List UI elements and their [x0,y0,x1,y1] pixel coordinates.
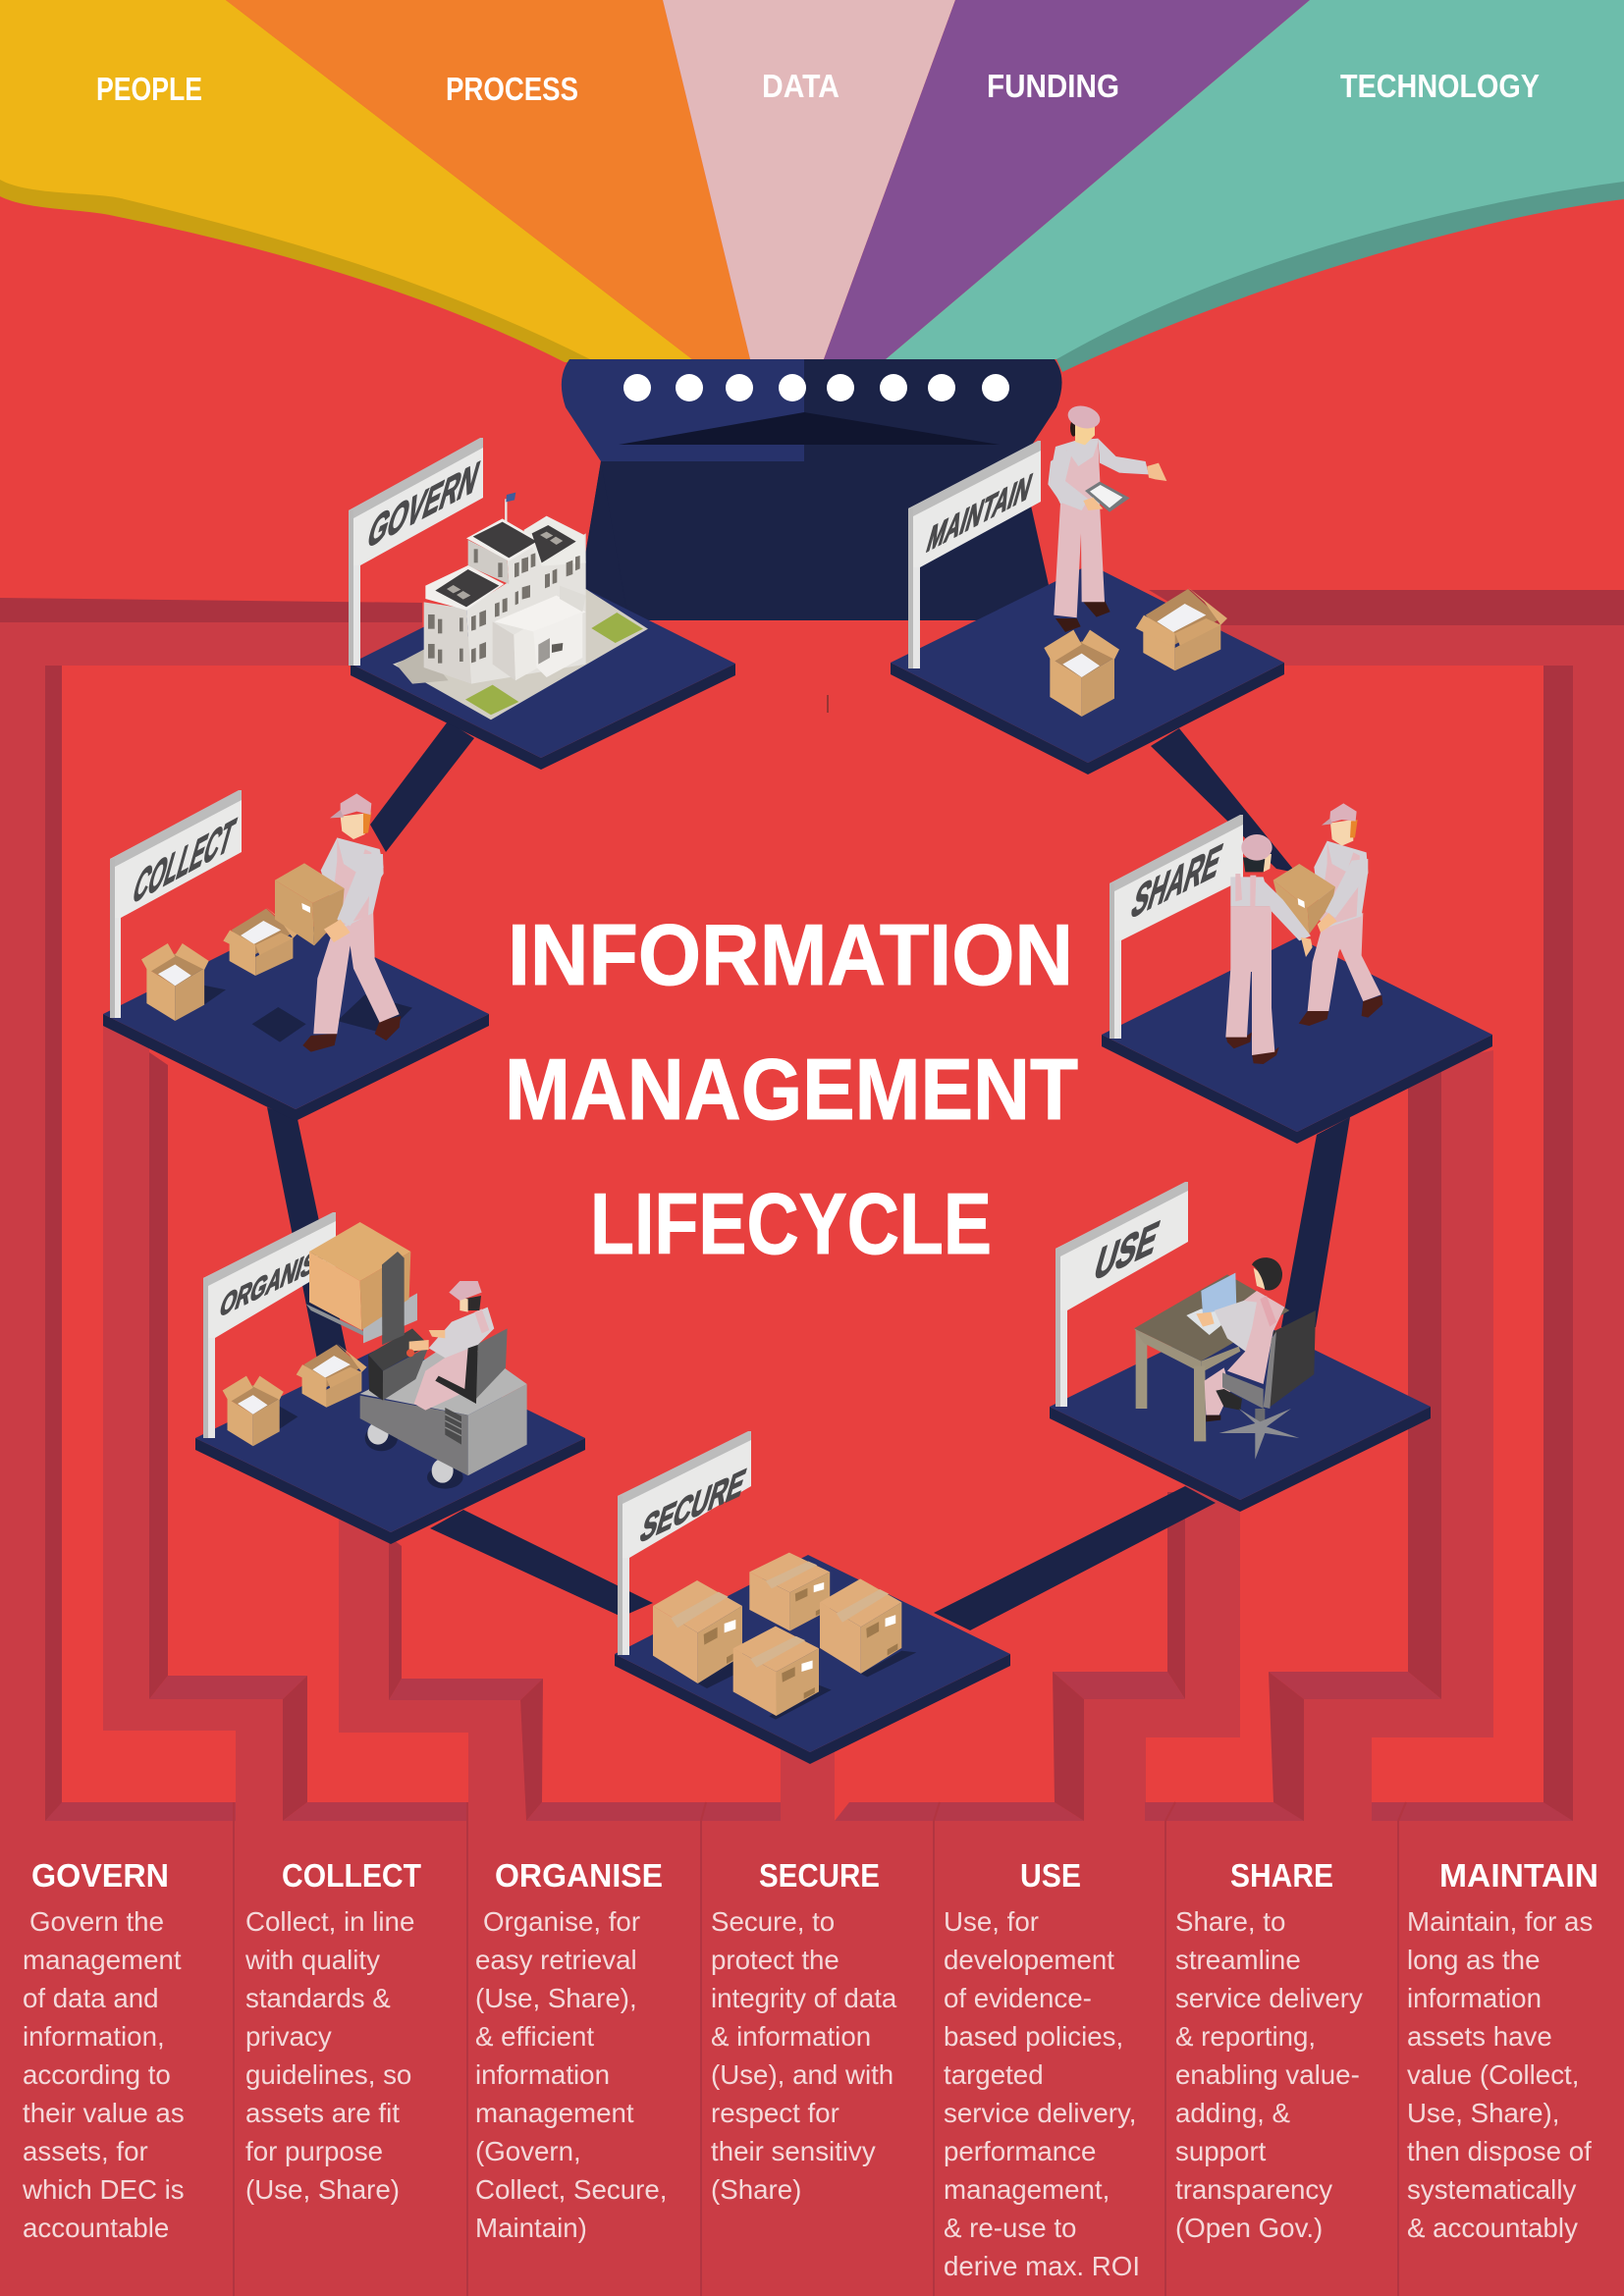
panel: maintain: MAINTAIN [1439,1857,1598,1894]
panel: organise: ORGANISE [495,1857,663,1894]
panel: govern: their value as [23,2098,185,2128]
connectors between platforms [267,721,1350,1630]
panel: use: derive max. ROI [944,2251,1140,2281]
panel: share [1175,1857,1363,2243]
panel: govern: management [23,1945,182,1975]
figure: forklift operator and boxes [223,1222,527,1489]
band: funding [824,0,1310,359]
panel: organise: (Use, Share), [475,1983,637,2013]
panel: maintain: long as the [1407,1945,1540,1975]
main title: INFORMATION [508,906,1073,1003]
panel: secure [711,1857,897,2205]
platform: share [1102,937,1492,1144]
panel: govern: assets, for [23,2136,148,2166]
platform: govern [351,493,735,770]
panel: secure: integrity of data [711,1983,897,2013]
panel: organise: information [475,2059,610,2090]
panel: collect: (Use, Share) [245,2174,400,2205]
panel: secure: (Use), and with [711,2059,893,2090]
infographic canvas: COLLECT [128,809,241,915]
panel: organise: easy retrieval [475,1945,637,1975]
panel: govern: according to [23,2059,171,2090]
band: data [663,0,955,359]
wall column: organise [283,1512,543,1821]
panel: use: based policies, [944,2021,1123,2052]
label: FUNDING: FUNDING [987,68,1119,104]
panel: share: enabling value- [1175,2059,1360,2090]
panel: share: (Open Gov.) [1175,2213,1323,2243]
panel: organise [475,1857,667,2243]
sign: collect [110,790,242,1018]
panel: share: streamline [1175,1945,1301,1975]
panel: collect: assets are fit [245,2098,400,2128]
small tick mark [827,695,829,713]
wall column: use [1053,1472,1305,1821]
panel: maintain: Use, Share), [1407,2098,1559,2128]
panel: organise: management [475,2098,634,2128]
panel: share: & reporting, [1175,2021,1316,2052]
label: DATA: DATA [762,68,839,104]
sign: organise [203,1212,336,1438]
panel: use: developement [944,1945,1114,1975]
band: people [0,0,692,359]
panel: maintain: & accountably [1407,2213,1578,2243]
panel: secure: respect for [711,2098,839,2128]
sign: secure: SECURE [635,1461,750,1552]
panel: use: & re-use to [944,2213,1076,2243]
sign: share: SHARE [1126,832,1227,929]
panel: collect: for purpose [245,2136,383,2166]
platform: secure [615,1555,1010,1764]
panel: govern [22,1857,185,2243]
label: PROCESS: PROCESS [446,71,578,107]
panel: secure: protect the [711,1945,839,1975]
sign: organise: ORGANISE [216,1236,334,1324]
sign: govern [349,438,485,666]
panel: organise: Collect, Secure, [475,2174,667,2205]
panel: use: service delivery, [944,2098,1136,2128]
figure: stacked boxes [653,1553,916,1720]
panel: collect: standards & [245,1983,391,2013]
panel: use: USE [1020,1857,1081,1894]
panel: secure: Secure, to [711,1906,835,1937]
wall column: share [1269,1050,1573,1821]
panel: collect: guidelines, so [245,2059,411,2090]
sign: maintain: MAINTAIN [923,465,1037,561]
panel: use: Use, for [944,1906,1039,1937]
panel: share: adding, & [1175,2098,1291,2128]
sign: use: USE [1089,1209,1164,1291]
panel: maintain [1407,1857,1598,2243]
panel: organise: Maintain) [475,2213,587,2243]
band shadows [0,180,1624,372]
panel: organise: & efficient [475,2021,594,2052]
panel: organise: Organise, for [483,1906,640,1937]
machine lights [623,374,1009,401]
panel: govern: Govern the [29,1906,164,1937]
panel: use: targeted [944,2059,1044,2090]
band: technology [886,0,1624,359]
building [393,493,648,720]
panel: maintain: Maintain, for as [1407,1906,1593,1937]
panel: share: transparency [1175,2174,1332,2205]
panel: collect: COLLECT [282,1857,421,1894]
panel: maintain: assets have [1407,2021,1552,2052]
figure: two workers sharing a box [1225,803,1382,1064]
panel: secure: SECURE [759,1857,880,1894]
wall frame behind the lifecycle [0,590,1624,2296]
platform: use [1050,1313,1431,1512]
panel: collect: Collect, in line [245,1906,414,1937]
figure: maintain worker and boxes [1044,402,1227,717]
panel: share: SHARE [1230,1857,1333,1894]
panel: share: Share, to [1175,1906,1285,1937]
panel: use: management, [944,2174,1110,2205]
platform: collect [103,918,489,1121]
panel: govern: information, [23,2021,165,2052]
panel: govern: accountable [23,2213,169,2243]
sign: use [1056,1182,1188,1407]
panel: maintain: information [1407,1983,1542,2013]
panel: use: of evidence- [944,1983,1092,2013]
panel: use: performance [944,2136,1096,2166]
panel: maintain: value (Collect, [1407,2059,1579,2090]
panel: govern: which DEC is [22,2174,185,2205]
platform: maintain [891,564,1284,774]
sign: share [1110,815,1243,1039]
panel: govern: GOVERN [31,1857,169,1894]
funnel bands [0,0,1624,372]
panel: share: service delivery [1175,1983,1363,2013]
panel: maintain: systematically [1407,2174,1576,2205]
sign: govern: GOVERN [362,451,485,559]
funnel machine [562,359,1062,620]
sign: secure [618,1431,751,1655]
panel: govern: of data and [23,1983,159,2013]
main title: MANAGEMENT [505,1041,1078,1138]
panel: secure: (Share) [711,2174,801,2205]
band: process [226,0,750,359]
main title [505,906,1078,1272]
panel: use [944,1857,1140,2281]
panel: organise: (Govern, [475,2136,581,2166]
panel: collect: with quality [244,1945,380,1975]
panel: collect [244,1857,421,2205]
panel: maintain: then dispose of [1407,2136,1592,2166]
wall column: collect [45,1021,307,1821]
wall column: secure [526,1737,1084,1826]
label: TECHNOLOGY: TECHNOLOGY [1340,68,1540,104]
panel: secure: their sensitivy [711,2136,876,2166]
panel: secure: & information [711,2021,871,2052]
panel: share: support [1175,2136,1267,2166]
panel: collect: privacy [245,2021,332,2052]
sign: maintain [908,441,1041,668]
figure: desk worker [1134,1257,1316,1460]
platform: organise [195,1343,585,1544]
label: PEOPLE: PEOPLE [96,71,202,107]
figure: collect worker and boxes [141,793,412,1052]
main title: LIFECYCLE [590,1175,992,1272]
